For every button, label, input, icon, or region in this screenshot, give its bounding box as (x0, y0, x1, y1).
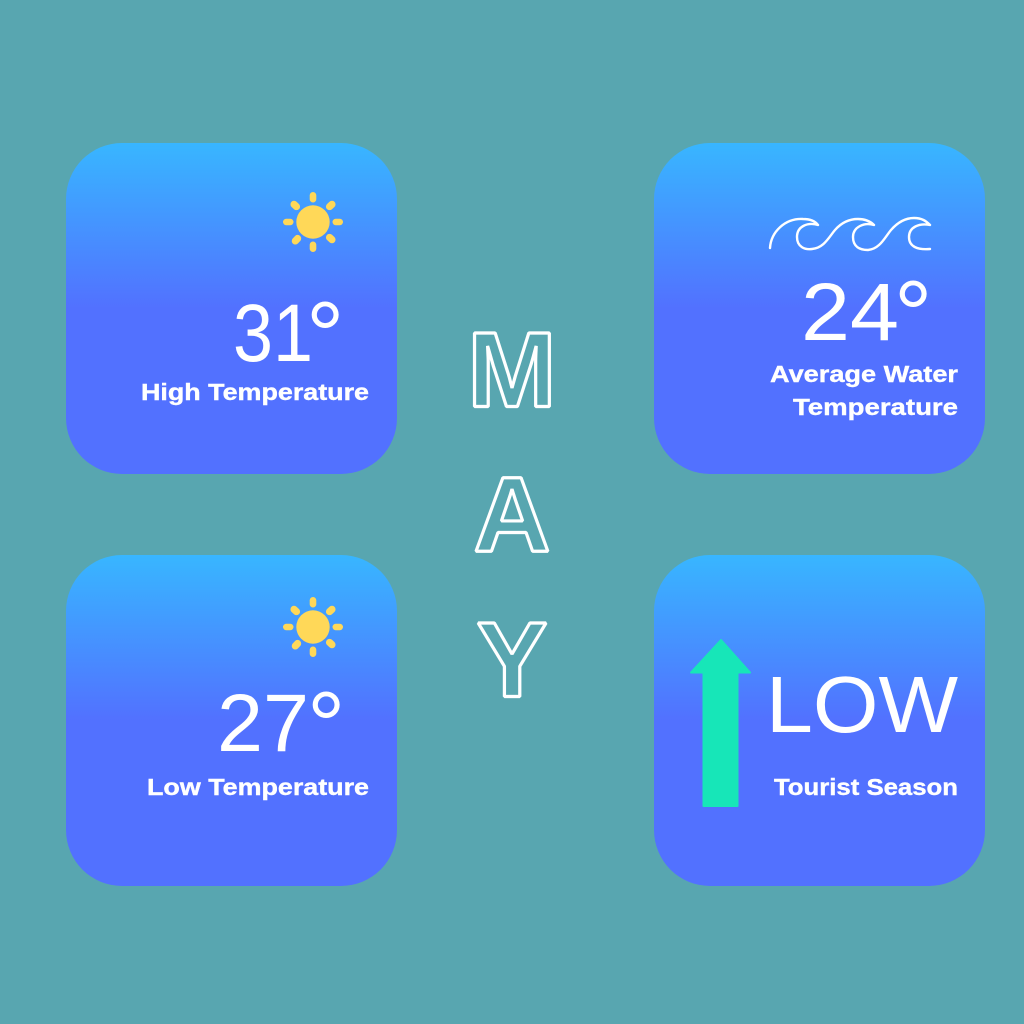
panel: high temperature (66, 143, 397, 474)
value: 27 degrees (217, 672, 345, 779)
label: tourist season: Tourist Season (774, 774, 958, 800)
icon: up arrow (691, 640, 750, 806)
icon: sun (283, 192, 343, 252)
value: 24 degrees: 24 (801, 267, 899, 358)
value: 27 degrees: ° (307, 672, 345, 779)
panel: average water temperature (654, 143, 985, 474)
panel: low temperature (66, 555, 397, 886)
icon: sun (283, 597, 343, 657)
value: 24 degrees: ° (894, 261, 932, 368)
label: high temperature: High Temperature (141, 379, 369, 405)
value: 24 degrees (801, 261, 932, 368)
title: MAY vertical outlined: Y (476, 600, 548, 720)
value: low: LOW (766, 660, 959, 749)
label: temperature: Temperature (793, 394, 958, 420)
icon: waves (770, 218, 930, 250)
title: MAY vertical outlined (467, 310, 557, 720)
panel: tourist season (654, 555, 985, 886)
title: MAY vertical outlined: M (467, 310, 557, 430)
value: 31 degrees: ° (306, 282, 344, 389)
title: MAY vertical outlined: A (473, 454, 551, 574)
value: 31 degrees (233, 282, 344, 389)
label: low temperature: Low Temperature (147, 774, 369, 800)
value: 27 degrees: 27 (217, 678, 309, 769)
value: 31 degrees: 31 (233, 288, 313, 379)
label: average water: Average Water (770, 361, 958, 387)
